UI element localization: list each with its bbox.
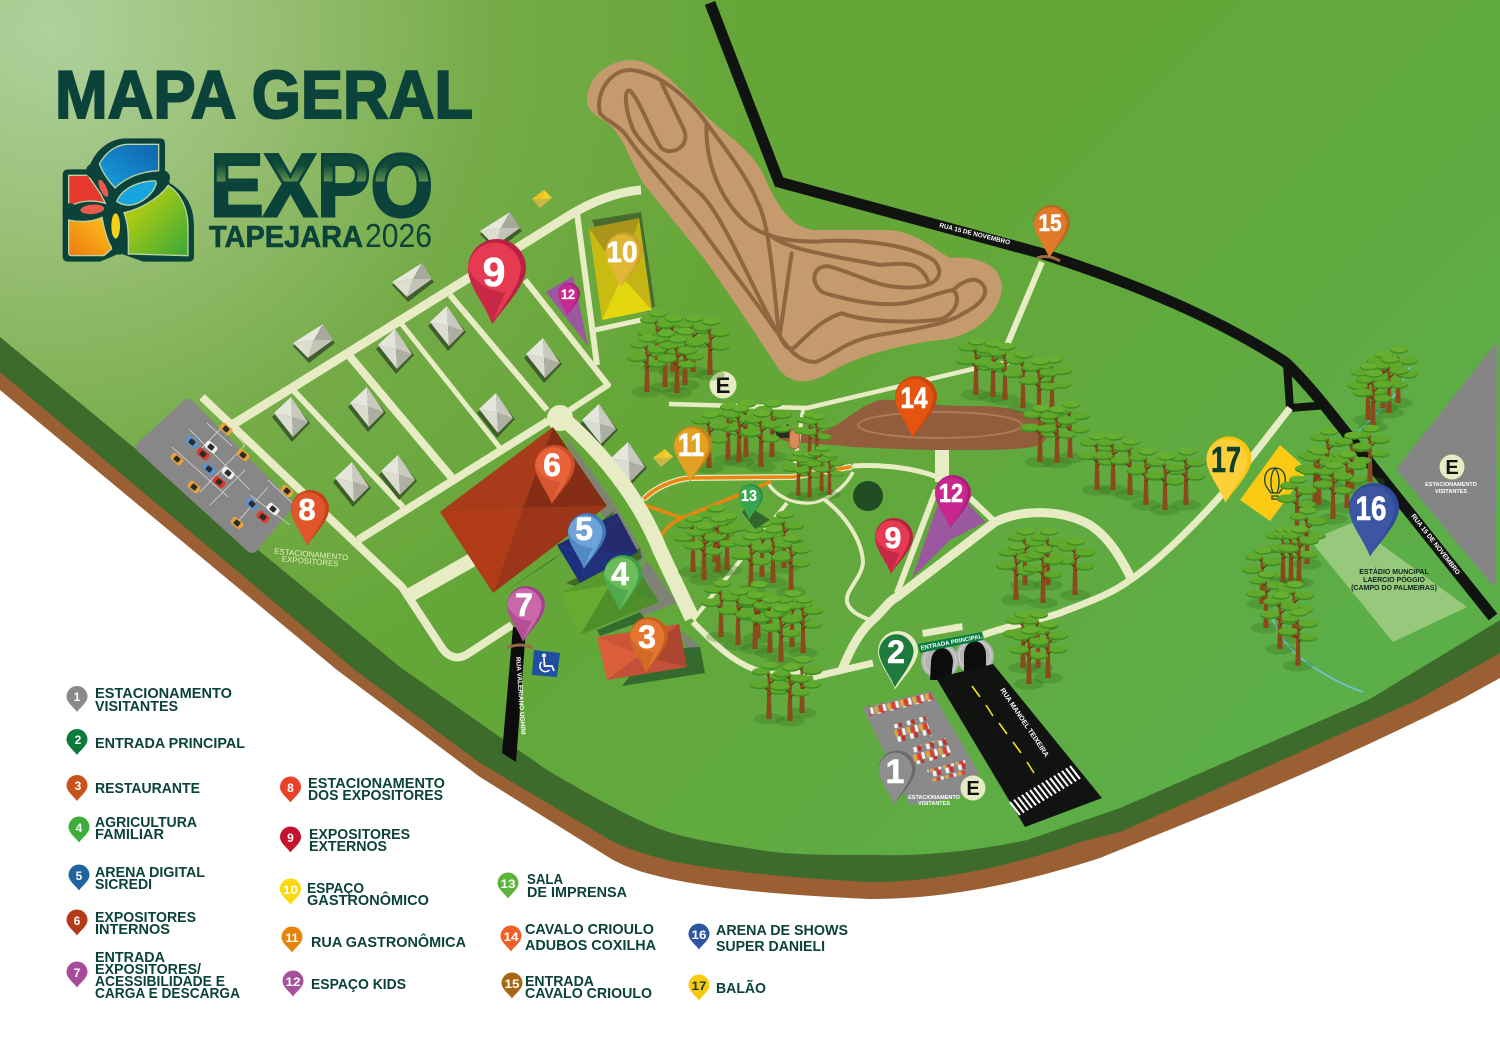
building 5 arena [557,513,642,590]
balloon area [1240,445,1308,521]
kids areas [546,276,985,578]
pin 9 large [468,239,526,324]
legend 1: 1 [74,690,81,704]
entrance sign [918,623,983,653]
road junction circle [547,405,573,431]
pin 13 [739,484,770,529]
legend 3: 3 [75,779,82,793]
legend 9 [280,826,410,855]
legend 9: 9 [287,831,294,845]
gastronomic street orange [645,467,850,538]
dark round plaza [853,481,883,511]
pin 12 large: 12 [939,478,963,508]
legend 9: EXPOSITORES [309,826,410,843]
pin 14: 14 [900,382,928,415]
legend 16: SUPER DANIELI [716,938,825,955]
legend 17: 17 [692,979,707,993]
pin 8: 8 [298,492,316,527]
legend 10 [280,878,429,909]
pin 5 [568,511,606,569]
legend 10: 10 [283,883,298,897]
label road Rua 15 [939,222,1461,576]
legend 13: DE IMPRENSA [527,884,627,901]
pin 1 [878,750,916,805]
dashes [972,686,1034,773]
racetrack [587,60,1002,381]
logo 2026: 2026 [365,217,432,254]
legend 5 [68,864,205,893]
legend 12: 12 [286,975,301,989]
legend 9: EXTERNOS [309,838,387,855]
pin 12 large [935,475,971,528]
icon: accessibility [532,650,560,677]
legend 5: 5 [76,869,83,883]
pin 10 [606,232,642,287]
stadium field [1310,523,1467,642]
label parking exhibitors: ESTACIONAMENTO [274,547,349,562]
pin 15: 15 [1038,210,1062,237]
logo EXPO: EXPO [210,135,433,235]
pin 12 small: 12 [561,286,575,302]
entrance sign: ENTRADA PRINCIPAL [920,634,983,652]
marker E visitors: E [966,778,980,800]
pin 3 [630,617,668,673]
legend 11: 11 [286,931,299,945]
legend 14: ADUBOS COXILHA [525,937,656,954]
legend 4: FAMILIAR [95,826,164,843]
legend 14 [500,921,656,954]
pin 4: 4 [611,556,629,592]
legend 7: EXPOSITORES/ [95,961,202,978]
title: MAPA GERAL [55,57,473,133]
legend 5: ARENA DIGITAL [95,864,205,881]
pin 9 small: 9 [885,522,901,555]
legend 13: SALA [527,871,563,888]
legend 16 [688,922,848,955]
road network [202,190,1290,677]
small entrance gate [775,424,800,449]
pin 9 large: 9 [483,249,505,295]
legend 2: ENTRADA PRINCIPAL [95,735,245,752]
legend 1: ESTACIONAMENTO [95,685,232,702]
pin 17 [1206,436,1252,502]
legend 7: ACESSIBILIDADE E [95,973,225,990]
pin 7 [507,586,545,642]
access street [502,627,533,762]
pin 12 small [558,283,580,315]
pin 6: 6 [543,447,561,483]
logo TAPEJARA: TAPEJARA [209,219,363,254]
pin 3: 3 [638,619,656,655]
parking visitors [863,691,986,807]
legend 6: 6 [74,914,81,928]
pin 1: 1 [886,753,904,791]
logo symbol [63,138,194,262]
pin 17: 17 [1211,439,1241,480]
pin 2: 2 [887,634,905,670]
access street: RUA VALERIANO UGHINI [514,657,526,735]
legend 17 [688,974,766,1000]
food space building 10 [589,212,655,320]
crosswalk [1010,766,1080,815]
legend 11: RUA GASTRONÔMICA [311,933,466,951]
pin 11: 11 [678,427,704,463]
pin 15 [1034,205,1070,261]
pin 13: 13 [741,488,757,505]
legend 14: 14 [504,930,519,944]
pin 8 [291,490,329,546]
legend 15 [502,972,652,1002]
label parking exhibitors: EXPOSITORES [281,555,339,568]
legend 3: RESTAURANTE [95,780,200,797]
legend 4: 4 [76,821,83,835]
marker E right: E [1445,457,1459,479]
legend 6: EXPOSITORES [95,909,196,926]
legend 8: 8 [287,781,294,795]
legend [66,685,848,1002]
main entrance road [936,664,1102,827]
pin 6 [535,445,575,504]
legend 16: ARENA DE SHOWS [716,922,848,939]
legend 7: ENTRADA [95,949,165,966]
legend 7: CARGA E DESCARGA [95,985,240,1002]
legend 17: BALÃO [716,979,766,997]
building 4 agriculture [561,557,659,636]
parking left [142,405,305,547]
label road Rua 15: RUA 15 DE NOVEMBRO [1409,513,1461,576]
trees [627,310,1418,726]
pin 2 [878,631,918,690]
pin 14 [895,376,937,438]
legend 14: CAVALO CRIOULO [525,921,654,938]
stadium field: ESTÁDIO MUNCIPAL [1359,567,1429,576]
pin 16 [1349,483,1399,556]
road: Rua 15 de Novembro [710,3,1493,617]
creek [1272,367,1410,692]
pin 10: 10 [606,236,638,269]
pin 7: 7 [515,587,533,623]
legend 10: ESPAÇO [307,880,364,897]
stadium field: (CAMPO DO PALMEIRAS) [1351,585,1437,592]
legend 16: 16 [692,928,707,942]
legend 13: 13 [500,877,516,891]
legend 8: DOS EXPOSITORES [308,787,443,804]
legend 1 [66,685,232,715]
legend 10: GASTRONÔMICO [307,891,429,909]
label road Rua 15: RUA 15 DE NOVEMBRO [939,222,1011,247]
tents [272,190,673,507]
pin 9 small [875,518,913,574]
legend 6 [66,909,196,938]
main entrance road: RUA MANOEL TEIXEIRA [998,687,1050,759]
wide central road [565,420,692,618]
legend 4 [68,814,197,843]
legend 2: 2 [75,733,82,747]
legend 1: VISITANTES [95,698,178,715]
legend 6: INTERNOS [95,921,170,938]
legend 5: SICREDI [95,876,152,893]
legend 11 [282,926,466,952]
parking visitors: VISITANTES [918,801,950,807]
legend 12: ESPAÇO KIDS [311,976,406,993]
marker E center: E [716,373,730,398]
building 3 restaurant [597,624,705,686]
legend 8 [280,775,445,804]
brown arena [777,400,1050,450]
legend 13 [498,871,627,901]
parking visitors: ESTACIONAMENTO [908,795,961,801]
parking area right: VISITANTES [1435,489,1467,495]
pin 11 [674,426,712,482]
sidewalks [563,433,700,652]
label parking right: ESTACIONAMENTO [1425,482,1478,488]
pin 5: 5 [575,511,593,547]
building 6 exhibitors [440,427,615,595]
pin 16: 16 [1356,490,1386,528]
tunnel entrance [921,638,994,680]
legend 12 [282,970,406,996]
legend 7 [66,949,240,1002]
legend 3 [66,775,200,801]
legend 2 [66,729,245,755]
legend 4: AGRICULTURA [95,814,197,831]
stadium field: LAERCIO PÓGGIO [1363,575,1425,584]
icon: balloon [1265,468,1285,499]
legend 8: ESTACIONAMENTO [308,775,445,792]
legend 15: CAVALO CRIOULO [525,985,652,1002]
parking area right [1396,342,1497,585]
legend 15: ENTRADA [525,973,594,990]
legend 15: 15 [504,977,520,991]
marker E right [1440,454,1464,480]
marker E center [710,372,736,398]
legend 7: 7 [74,966,81,980]
pin 4 [604,555,642,611]
